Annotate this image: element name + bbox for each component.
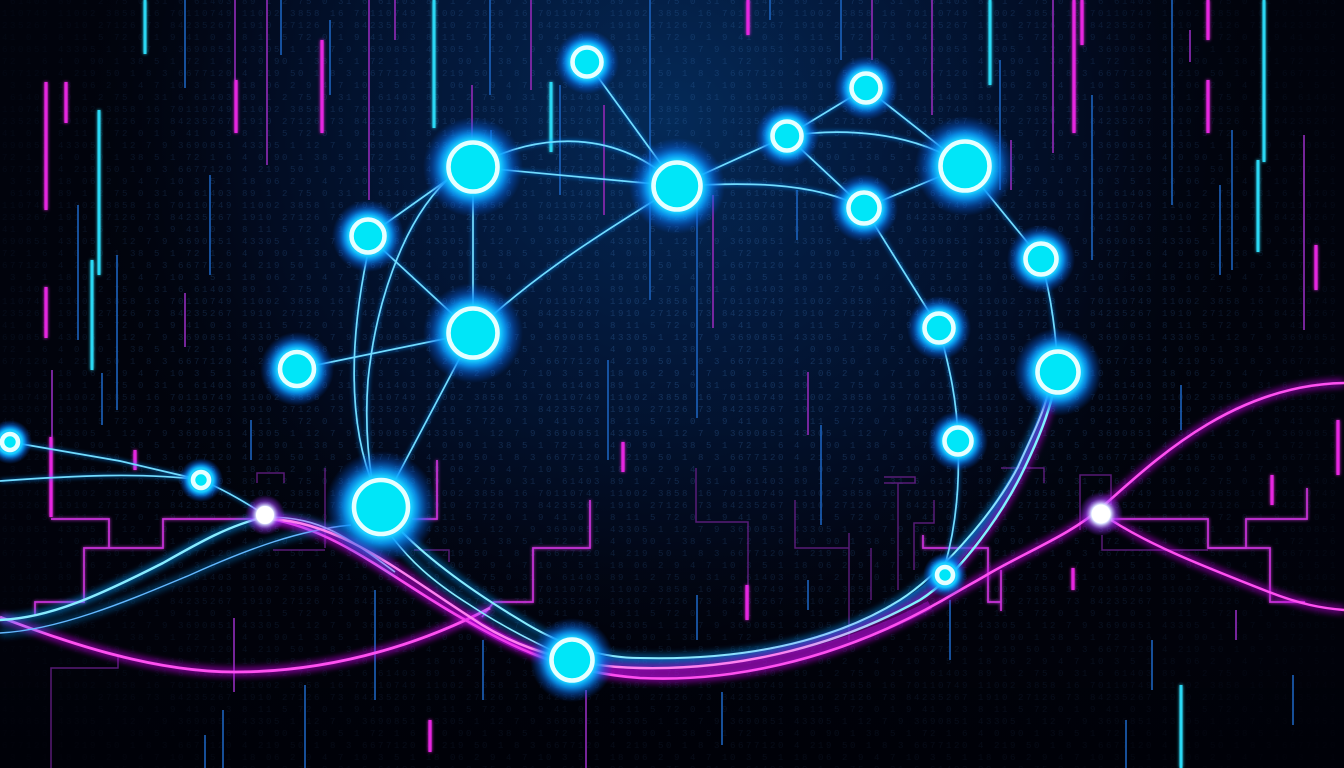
node: right medium xyxy=(1014,328,1102,416)
dim circuit traces xyxy=(51,468,1208,768)
node: upper right xyxy=(834,56,898,120)
node: right inner xyxy=(907,296,971,360)
node: small on sweep xyxy=(923,553,967,597)
node: top right large xyxy=(915,116,1015,216)
node: centre right xyxy=(830,174,898,242)
curve: hill top xyxy=(270,517,395,572)
node: middle left large xyxy=(423,283,523,383)
node: far left xyxy=(260,332,334,406)
node: top centre large xyxy=(629,138,725,234)
curve: second strand left xyxy=(392,537,551,650)
curve: main magenta wave xyxy=(270,383,1344,679)
node: bottom centre xyxy=(530,618,614,702)
magenta wave curves xyxy=(0,383,1344,679)
bright circuit traces xyxy=(35,460,1307,617)
bottom darkening xyxy=(0,420,1344,768)
curve: thin cyan rise xyxy=(0,525,351,633)
curve: cyan strand A from big node to right node xyxy=(402,393,1048,658)
curve: left cyan rise xyxy=(0,517,265,620)
node: white junction right xyxy=(1079,492,1123,536)
node: upper middle xyxy=(755,104,819,168)
magenta band on bottom sweep xyxy=(470,605,930,673)
node: small far left xyxy=(0,420,32,464)
network nodes xyxy=(0,30,1123,702)
node: top xyxy=(555,30,619,94)
node: right lower xyxy=(928,411,988,471)
node: right upper xyxy=(1007,225,1075,293)
node: lower left largest xyxy=(325,451,437,563)
cyan wave curves xyxy=(0,393,1048,658)
curve: left magenta arc xyxy=(0,608,490,672)
node: small left xyxy=(179,458,223,502)
node: left upper xyxy=(332,200,404,272)
network links xyxy=(0,62,1058,565)
curve: strand B pink turning cyan xyxy=(270,393,1053,668)
node: top left large xyxy=(423,117,523,217)
node: white junction left xyxy=(245,495,285,535)
glow band between cyan double strand xyxy=(560,393,1050,663)
curve: right descending magenta xyxy=(1111,520,1344,610)
